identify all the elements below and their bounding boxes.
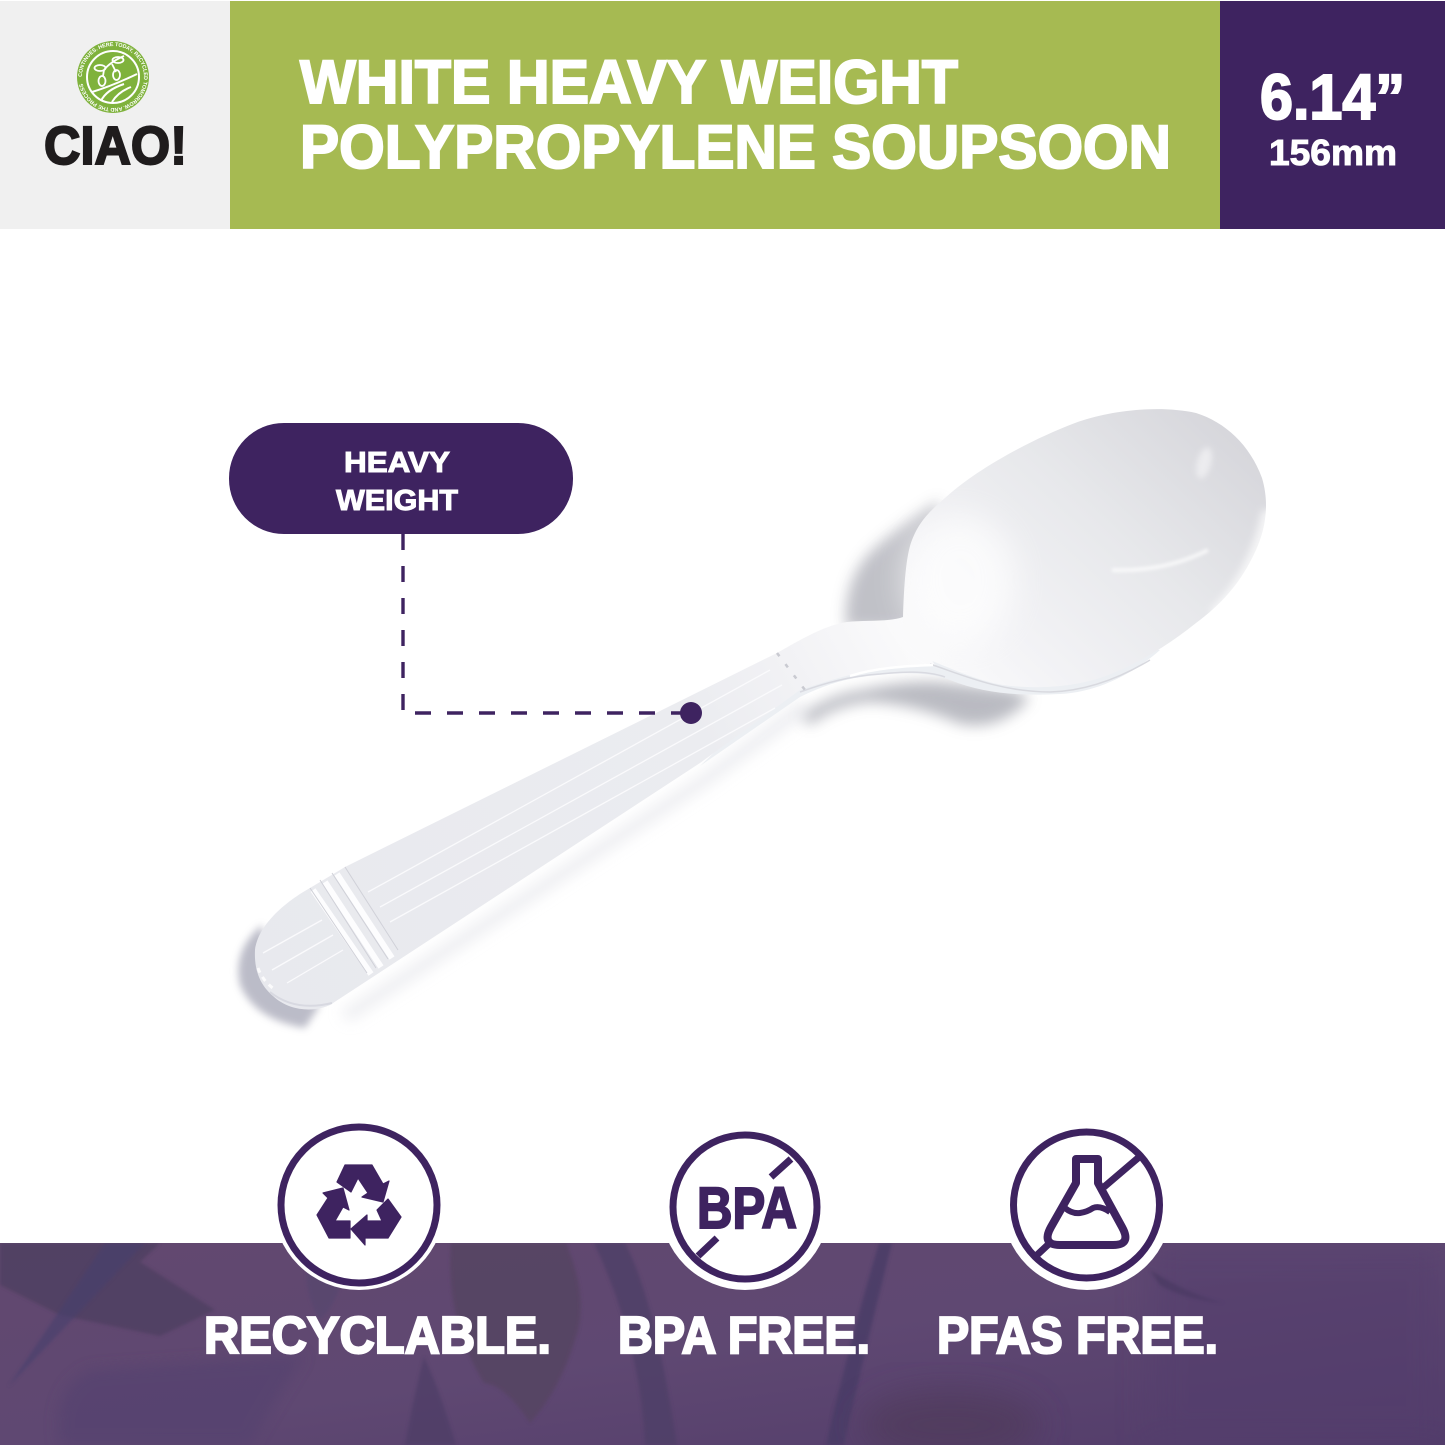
title [300, 48, 1171, 181]
icon: crossed flask [1037, 1158, 1138, 1255]
header bar [0, 1, 1445, 229]
callout pill [229, 423, 573, 534]
callout dot [680, 702, 702, 724]
title: POLYPROPYLENE SOUPSOON [300, 113, 1171, 181]
bottom band with leaf background [0, 1243, 1445, 1445]
badge labels: PFAS FREE. [937, 1307, 1218, 1365]
spoon bowl [903, 409, 1266, 687]
size badge [1260, 61, 1405, 173]
callout pill: WEIGHT [336, 485, 458, 517]
raised grip ribs [313, 874, 392, 974]
badge: BPA free [660, 1120, 830, 1290]
badge: PFAS free [1002, 1120, 1172, 1290]
badge labels: RECYCLABLE. [204, 1307, 551, 1365]
size badge: 6.14” [1260, 61, 1405, 133]
icon: logo badge: CONTINUES. HERE TODAY, RECYCLED TOMORROW. AND THE PROCESS [78, 42, 148, 112]
size badge: 156mm [1269, 132, 1397, 173]
callout leader line [403, 534, 682, 713]
spoon shadows [238, 500, 1030, 1028]
logo wordmark: CIAO! [44, 116, 187, 176]
logo: CIAO! [44, 41, 187, 176]
callout pill: HEAVY [344, 447, 450, 479]
icon: recycle arrows [317, 1165, 401, 1245]
handle ribs [263, 653, 805, 983]
callout: heavy weight [229, 423, 702, 724]
icon: crossed BPA: BPA [697, 1176, 797, 1241]
icon: crossed BPA [697, 1159, 797, 1256]
title: WHITE HEAVY WEIGHT [300, 48, 958, 116]
spoon rim layer [700, 640, 1160, 766]
product photo: white spoon [238, 409, 1275, 1028]
spoon handle [255, 617, 935, 1009]
badge: recyclable [273, 1118, 445, 1290]
badge labels: BPA FREE. [618, 1307, 870, 1365]
bowl highlights [800, 446, 1275, 692]
badge labels [204, 1307, 1218, 1365]
